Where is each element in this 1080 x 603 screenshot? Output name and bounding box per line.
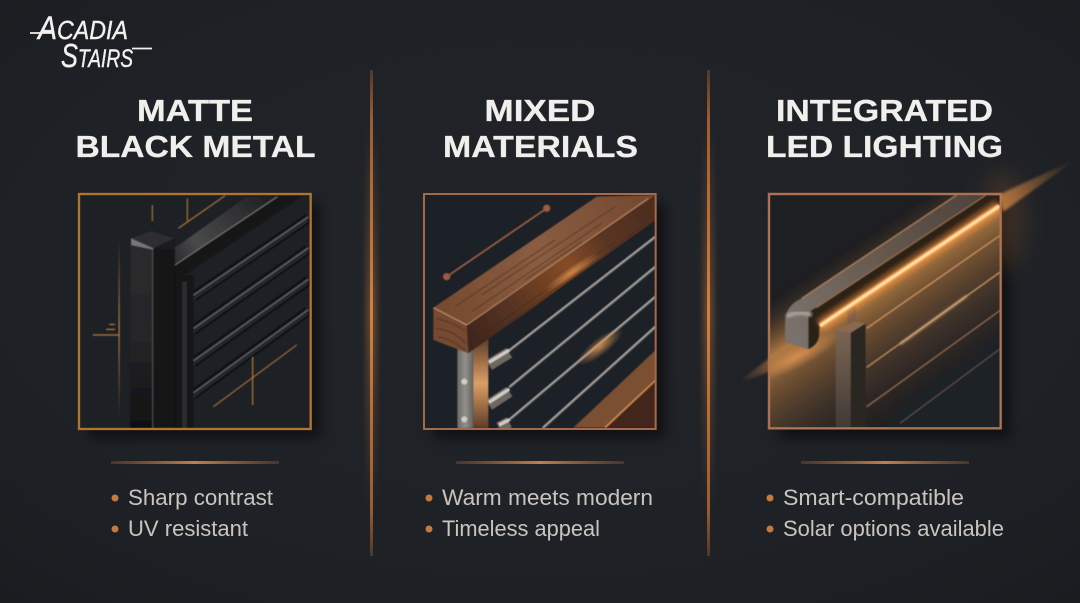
bullets: mixed materials (426, 485, 653, 541)
underline right (801, 461, 969, 464)
bullets: mixed materials: Timeless appeal (442, 516, 600, 541)
bullets: LED lighting: Smart-compatible (783, 485, 964, 510)
heading: Mixed Materials (443, 93, 638, 164)
light flare left (740, 343, 810, 383)
handrail (175, 197, 277, 265)
logo: Acadia Stairs: ACADIA (36, 10, 128, 46)
post (847, 306, 856, 324)
heading: Integrated LED Lighting: LED LIGHTING (766, 129, 1003, 164)
divider right (703, 70, 714, 556)
copper accent lines (93, 196, 297, 407)
bullets: matte black metal: UV resistant (128, 516, 248, 541)
post (130, 245, 153, 428)
heading: Matte Black Metal: BLACK METAL (76, 129, 316, 164)
logo: Acadia Stairs: STAIRS (61, 37, 133, 74)
amber glow (769, 194, 1001, 428)
panel: matte black metal illustration (79, 194, 320, 438)
light flare right (998, 160, 1073, 212)
cables (867, 235, 1001, 423)
LED strip (820, 206, 999, 326)
lower wood (573, 350, 656, 428)
heading: Integrated LED Lighting: INTEGRATED (776, 93, 993, 128)
ferrules (489, 350, 509, 428)
bullets: LED lighting: Solar options available (783, 516, 1004, 541)
wood handrail (433, 195, 656, 325)
bullets: matte black metal: Sharp contrast (128, 485, 273, 510)
cables (500, 236, 656, 428)
handrail (807, 195, 1000, 350)
heading: Matte Black Metal (76, 93, 316, 164)
heading: Integrated LED Lighting (766, 93, 1003, 164)
outer glow behind frame (983, 170, 1023, 270)
lower right fade to blue-grey (934, 372, 948, 383)
bullets: mixed materials: Warm meets modern (442, 485, 653, 510)
underline center (456, 461, 624, 464)
copper pin line (443, 205, 550, 280)
balusters (193, 217, 308, 397)
panel: integrated LED lighting illustration (740, 160, 1073, 438)
post (457, 348, 473, 428)
heading: Mixed Materials: MATERIALS (443, 129, 638, 164)
heading: Matte Black Metal: MATTE (137, 93, 253, 128)
divider left (366, 70, 377, 556)
bullets: LED lighting (766, 485, 1004, 541)
heading: Mixed Materials: MIXED (484, 93, 596, 128)
panel: mixed materials illustration (424, 194, 665, 438)
logo: Acadia Stairs (30, 10, 152, 74)
inner post (175, 275, 193, 428)
underline left (111, 461, 279, 464)
bullets: matte black metal (112, 485, 273, 541)
